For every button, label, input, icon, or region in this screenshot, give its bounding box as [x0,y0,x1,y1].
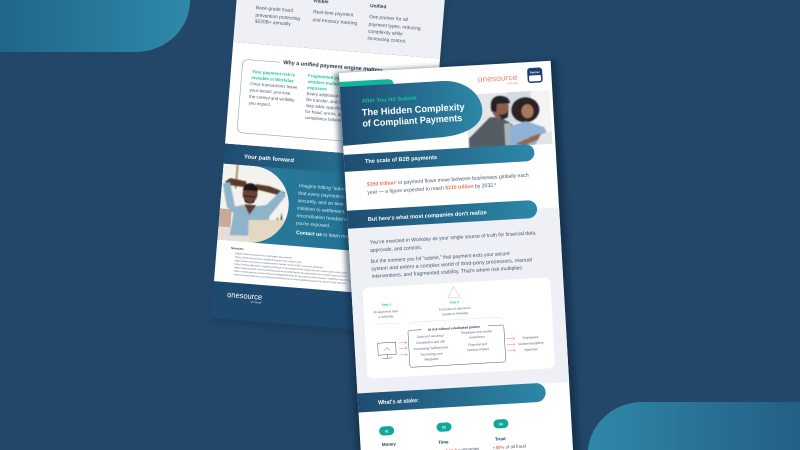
front page [335,60,580,450]
title: of Compliant Payments [362,112,463,129]
forearms behind head [225,178,248,188]
heading: Sources: [231,246,244,251]
section band: scale [344,144,535,172]
section band: scale: The scale of B2B payments [365,155,437,165]
back page [211,0,447,339]
column: unified: payment types, reducing [368,22,421,32]
icon: warning triangle [447,286,460,298]
body text: Imagine hitting "submit" and knowing [299,183,379,195]
body text: initiation to settlement, without [297,206,363,217]
risk box: At risk without a dedicated partner [428,325,481,332]
logo: onesource white: onesource [227,290,263,302]
body text: approvals, and controls. [370,245,422,254]
step 1 [373,302,399,319]
panel: sources [214,240,424,298]
column: visible: and treasury tracking [312,17,358,27]
card: fragmented payment vendors: exposure [307,85,327,92]
bracket strokes [375,317,502,327]
risk list right: Employee and vendor [461,329,493,335]
stake: money [379,426,397,447]
risk box [408,323,506,367]
stakeholder labels: Vendors/suppliers [518,341,544,346]
body text: that every payment is processed [298,191,369,202]
body text: interventions, and fragmented visibility. That's where risk multiplies. [372,265,524,280]
body text: securely, and on time — from [297,198,361,209]
call to action: Contact us to learn more. [296,230,354,241]
stake: trust: Trust [495,436,506,442]
heading: Why a unified payment engine matters [283,60,383,74]
footer: virtual [250,301,262,305]
heading: Your path forward [244,154,295,164]
section band: what's at stake: What's at stake: [378,398,419,406]
column: secure: $220B+ annually [255,19,292,27]
card: fragmented payment vendors: Every additional vendor, [307,91,354,100]
body text: But the moment you hit "submit," that payment exits your secure [371,251,510,265]
risk list left: Processing inefficiencies [413,345,449,351]
card: fragmented payment vendors: step adds opportunities [306,103,352,112]
text: scale of payments: $150 trillion¹ in payment flows move between businesses globally each [367,173,529,188]
column: unified: Unified [370,3,387,10]
card: invisible risk: Your payment risk is [252,69,296,77]
stake: trust: 03 [499,422,503,426]
partner badge: Partner [530,70,541,75]
column: unified: One partner for all [369,14,408,23]
card: fragmented payment vendors: Fragmented payment [308,73,353,82]
source list: https://www.gartner.com/en/finance/insights/payment-operations-and-treasury-visibility-research [234,270,349,282]
stakeholder labels: Employees [522,335,539,340]
stake: time [436,421,480,450]
panel: what companies don't realize [347,199,569,394]
column: unified: increasing control. [367,36,406,45]
body text: reconciliation headaches. Until then, [296,213,375,225]
card: invisible risk: the control and visibility [249,94,295,103]
stake: time: Time [438,439,449,445]
stake: money: 01 [385,429,389,434]
diagram card [362,277,555,379]
risk list right: treasury impact [467,347,489,352]
logo: onesource: onesource [477,73,518,84]
section band: what's at stake [357,383,546,412]
corner shape: top left [0,0,190,52]
card: fragmented payment vendors: compliance failures. [305,115,344,123]
source list: https://www.pymnts.com/news/b2b-payments/2024/report-ap-automation-and-vendor-payment-risk [234,266,348,278]
header panel [340,79,484,146]
source list: https://www.onesource.org/payments-market-report-2032-overview-summary [235,259,324,269]
corner shape: bottom right [588,402,800,450]
photo: relaxed man at laptop [217,163,293,247]
text: scale of payments: year — a figure expected to reach $210 trillion by 2032.² [367,183,497,196]
risk list left: Compliance and risk [416,339,446,345]
source list [233,252,351,285]
logo: onesource: virtual [507,81,519,85]
text: scale of payments [367,173,529,196]
step 1: in Workday [378,314,394,319]
card: invisible risk: invisible in Workday [251,75,294,83]
stake: money: Money [382,441,397,447]
panel: your path forward [217,144,349,250]
column: unified: complexity while [368,29,403,37]
panel: why a unified payment engine [225,42,440,160]
card: fragmented payment vendors: file transfer, and manual [306,97,353,106]
risk list left: integration [424,357,439,362]
panel: what companies don't realize: But here's what most companies don't realize [368,210,487,223]
body text: system and enters a complex world of third-party processors, manual [371,257,532,272]
step 1: All payments start [373,309,398,314]
body text: you're exposed. [296,221,330,229]
eyebrow: After You Hit Submit [361,96,417,105]
step 1: Step 1 [382,302,391,307]
outlined box [237,59,431,148]
body text: You've invested in Workday as your single source of truth for financial data, [370,230,537,246]
column: secure: prevention protecting [255,13,301,22]
card: fragmented payment vendors: for fraud, errors, and [305,109,346,117]
risk list left: Data and accuracy [417,333,444,339]
title: The Hidden Complexity [361,101,466,118]
partner badge [527,67,543,83]
source list: https://www.mckinsey.com/industries/financial-services/global-payments-report-2024-full-text [233,273,347,285]
arrows: to stakeholders [506,337,515,352]
card: fragmented payment vendors: vendors multiply your [307,79,354,88]
stake: trust [491,418,527,450]
stake: time: 02 [442,425,446,430]
step 2: Execution of payments [439,306,471,312]
risk list right: Financial and [468,342,487,347]
risk list right: experience [469,335,485,339]
source list: https://www.onesource.org/path-payments [235,252,293,260]
footer [211,281,421,335]
step 2 [439,299,471,317]
column: visible: Real-time payment [313,9,354,18]
card: invisible risk: Once transactions leave [250,81,298,90]
stakeholder labels: Agencies [525,347,538,352]
header tab [339,79,394,88]
step 2: Step 2 [450,300,459,305]
panel: benefits [233,0,445,59]
risk list left: Technology and [420,352,443,357]
icon: monitor [378,342,396,359]
card: invisible risk: you expect. [248,100,271,107]
source list: https://www.afponline.org/docs/default-source/payments-fraud-survey-report-and-control.pdf [234,263,348,275]
shirt with raised sleeves [219,182,287,239]
source list: https://www.onesource.org/b2b-payments-market-size [235,256,303,264]
body text [370,230,539,280]
card: invisible risk: your tenant, you lose [250,87,291,96]
section band [347,200,538,229]
arrows: into risk box [399,341,407,356]
step 2: outside of Workday [442,311,469,316]
column: secure: Bank-grade fraud [256,5,294,14]
photo: two colleagues [465,90,553,149]
